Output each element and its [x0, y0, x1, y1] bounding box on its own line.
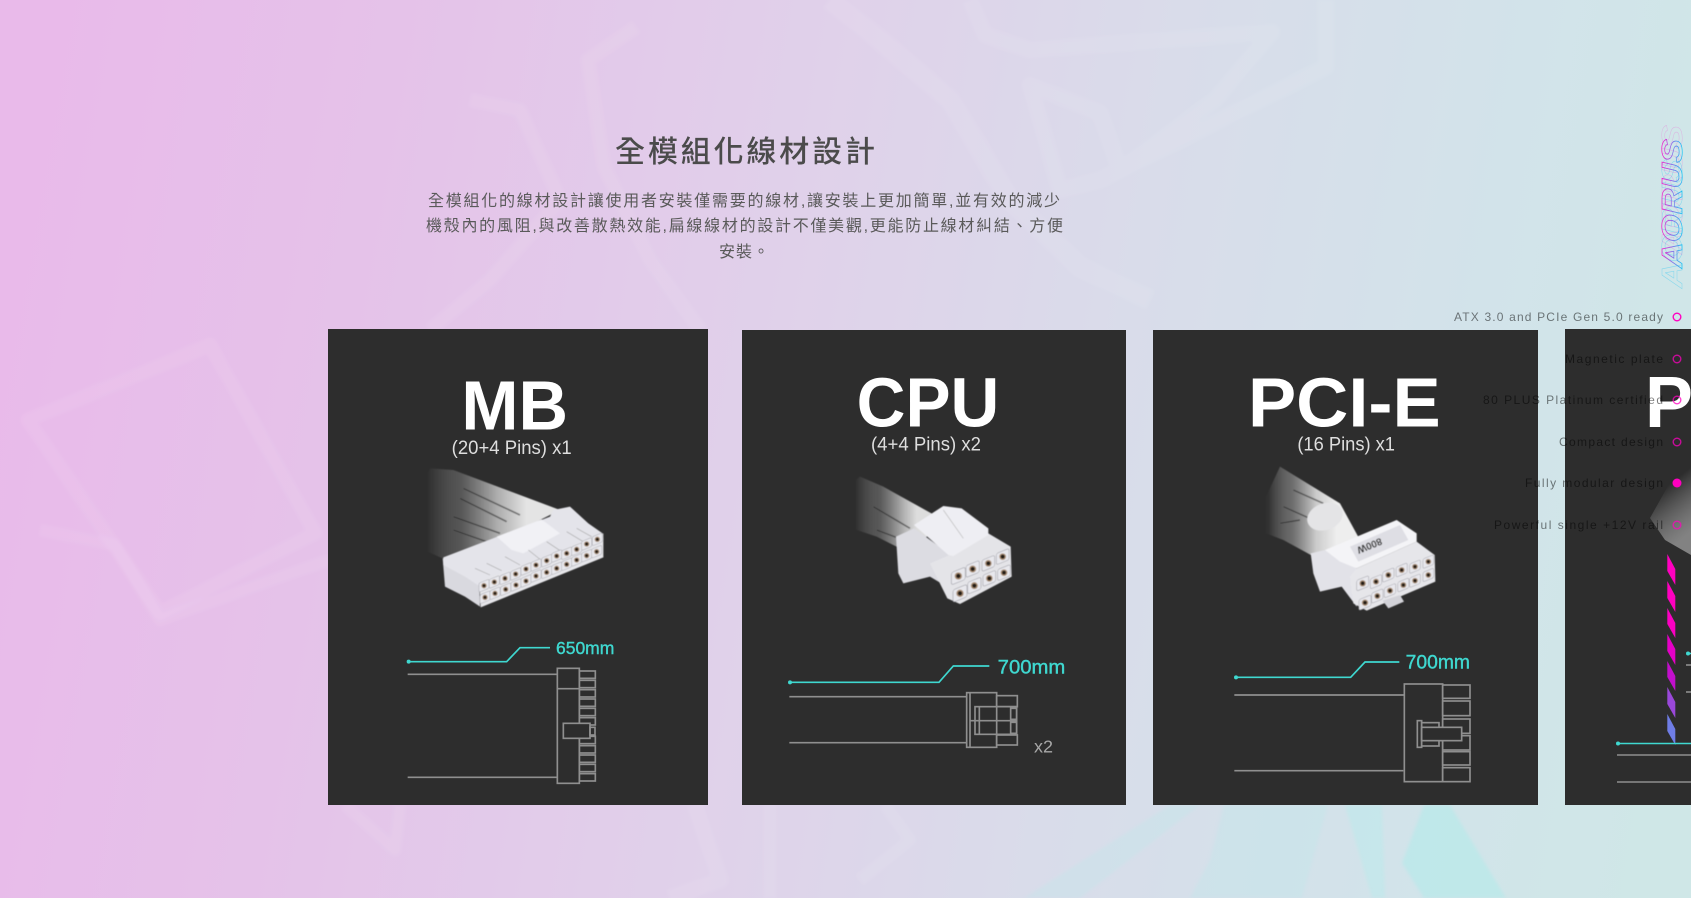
CPU cable diagram	[789, 693, 1017, 747]
panel: CPU	[742, 330, 1126, 805]
PCI-E cable diagram	[1234, 684, 1470, 782]
fourth card connector wires (cropped)	[1650, 445, 1691, 555]
MB cable diagram	[408, 668, 595, 783]
MB connector photo	[413, 468, 603, 607]
MB pin count: (20+4 Pins) x1	[452, 438, 572, 459]
CPU title: CPU	[857, 364, 999, 442]
nav item: ATX 3.0: ATX 3.0 and PCIe Gen 5.0 ready	[1454, 310, 1663, 324]
AORUS vertical logo: AORUS	[1657, 158, 1689, 289]
PCI-E pin count: (16 Pins) x1	[1297, 435, 1395, 456]
panel: partially visible fourth card	[1565, 329, 1691, 805]
gradient stripes	[1667, 554, 1675, 745]
MB length arrow: 650mm	[556, 638, 614, 658]
PCI-E length arrow	[1234, 652, 1470, 679]
panel: MB	[328, 329, 708, 805]
CPU quantity: x2	[1034, 737, 1053, 757]
fourth card length arrow	[1616, 652, 1691, 746]
800W marking: 800W	[1355, 535, 1383, 555]
AORUS vertical logo: AORUS	[1657, 138, 1689, 269]
description text: 全模組化的線材設計讓使用者安裝僅需要的線材,讓安裝上更加簡單,並有效的減少	[428, 191, 1060, 210]
CPU pin count: (4+4 Pins) x2	[871, 435, 981, 456]
AORUS vertical logo	[1657, 124, 1689, 289]
nav item: compact design: Compact design	[1559, 435, 1663, 449]
description text: 安裝。	[719, 243, 769, 261]
AORUS vertical logo: AORUS	[1657, 124, 1689, 255]
MB length arrow	[407, 638, 614, 664]
description text: 機殼內的風阻,與改善散熱效能,扁線線材的設計不僅美觀,更能防止線材糾結、方便	[426, 217, 1063, 235]
MB title: MB	[461, 366, 568, 444]
nav item: 80 PLUS: 80 PLUS Platinum certified	[1483, 393, 1663, 407]
fourth card cable lines	[1617, 665, 1691, 782]
CPU connector photo	[847, 477, 1012, 604]
nav item: single rail: Powerful single +12V rail	[1494, 518, 1663, 532]
CPU length arrow: 700mm	[998, 657, 1065, 678]
side navigation	[1454, 310, 1682, 532]
panel: PCI-E	[1153, 330, 1538, 805]
description text	[426, 191, 1063, 261]
heading: 全模組化線材設計	[615, 136, 875, 169]
nav item: magnetic plate: Magnetic plate	[1565, 352, 1663, 366]
CPU length arrow	[788, 657, 1065, 684]
PCI-E length arrow: 700mm	[1406, 652, 1470, 673]
PCI-E connector photo	[1266, 467, 1435, 611]
nav item: fully modular design (active): Fully modular design	[1525, 476, 1663, 490]
PCI-E title: PCI-E	[1248, 364, 1441, 442]
